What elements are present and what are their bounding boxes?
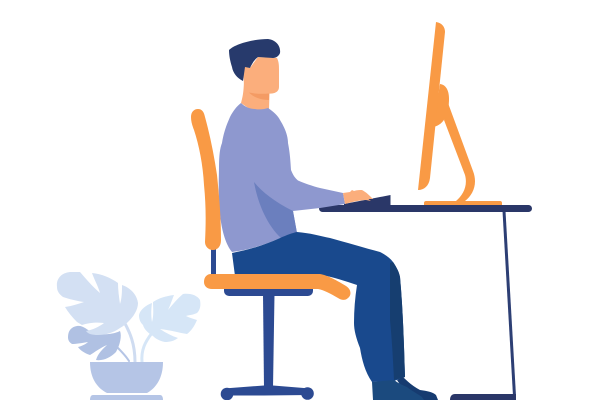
sweater	[219, 103, 345, 252]
chair base with casters	[221, 386, 314, 400]
monitor base	[424, 201, 502, 205]
seat underside	[224, 284, 313, 296]
neck shadow	[249, 92, 269, 100]
hair	[229, 39, 280, 81]
small dark leaf	[68, 326, 121, 360]
person	[219, 39, 438, 400]
desk foot	[450, 394, 516, 400]
right leaf	[139, 294, 200, 342]
chair	[211, 248, 314, 400]
neck	[241, 76, 270, 112]
far shoe	[397, 377, 438, 400]
pot base	[90, 395, 163, 400]
monitor	[418, 22, 502, 205]
chair column	[263, 294, 274, 388]
large leaf	[57, 272, 138, 335]
desk top	[319, 205, 532, 212]
plant	[57, 272, 200, 400]
seat	[204, 274, 350, 300]
monitor hinge	[433, 84, 449, 127]
plant stems	[117, 320, 152, 362]
trousers shadow	[390, 262, 405, 380]
chair post	[211, 248, 216, 278]
chair seat and backrest	[191, 109, 350, 300]
desk leg	[502, 211, 516, 396]
face	[243, 57, 279, 94]
trousers	[232, 232, 405, 382]
desk	[319, 205, 532, 400]
near shoe	[372, 380, 424, 400]
keyboard	[344, 195, 390, 206]
backrest	[191, 109, 221, 250]
sweater shadow	[254, 182, 297, 238]
plant pot	[90, 362, 163, 393]
hand	[343, 190, 373, 204]
monitor screen	[418, 22, 445, 190]
monitor stand arm	[444, 103, 475, 201]
